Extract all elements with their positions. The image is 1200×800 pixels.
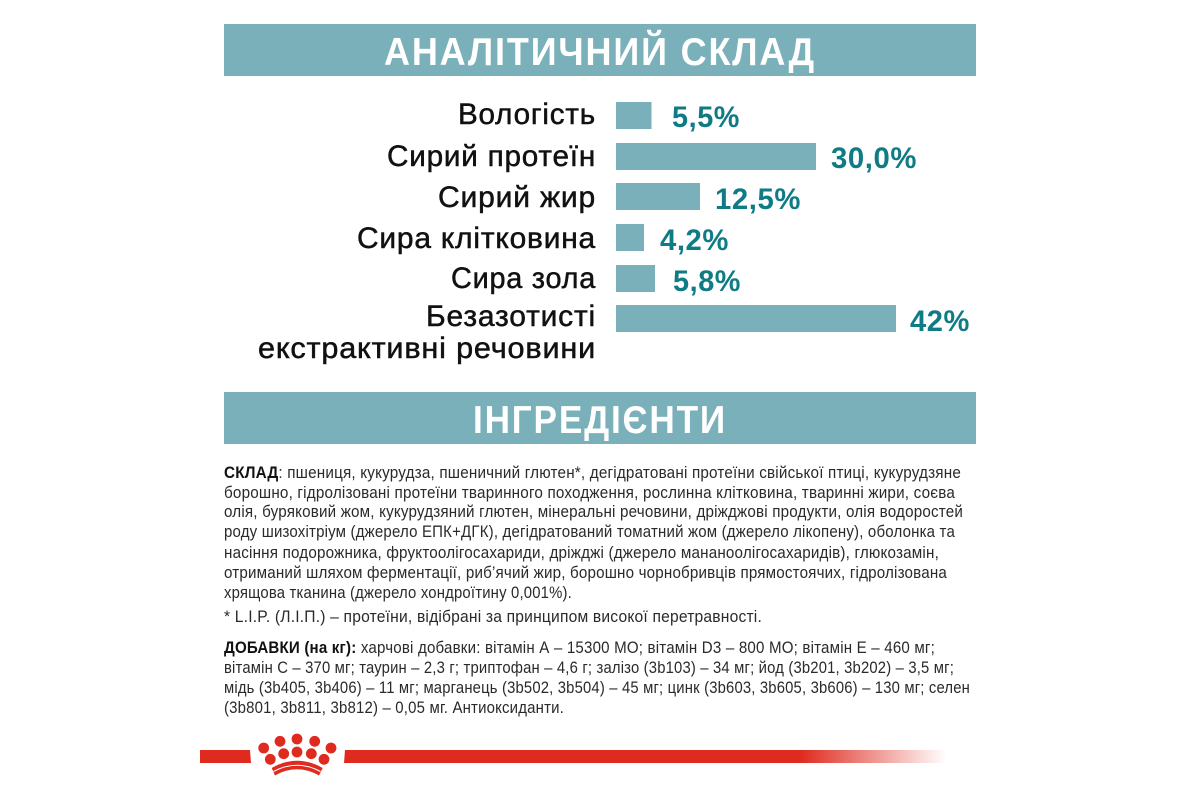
- text block: additives: вітамін С – 370 мг; таурин – 2,3 г; триптофан – 4,6 г; залізо (3b103) – 34 мг; йод (3b201, 3b202) – 3,5 мг;: [224, 659, 954, 677]
- text block: composition: СКЛАД: пшениця, кукурудза, пшеничний глютен*, дегідратовані протеїни свійської птиці, кукурудзяне: [224, 464, 961, 482]
- row: crude fat: [438, 181, 801, 216]
- text block: composition: насіння подорожника, фруктоолігосахариди, дріжджі (джерело мананоолігосахаридів), глюкозамін,: [224, 544, 939, 562]
- text block: composition: роду шизохітріум (джерело ЕПК+ДГК), дегідратований томатний жом (джерело лікопену), оболонка та: [224, 523, 956, 541]
- header: analytical composition: [224, 24, 976, 76]
- row: crude ash: Сира зола: [451, 262, 596, 295]
- row: nitrogen-free extract: екстрактивні речовини: [258, 332, 596, 365]
- header: ingredients: ІНГРЕДІЄНТИ: [473, 399, 727, 442]
- text block: additives: мідь (3b405, 3b406) – 11 мг; марганець (3b502, 3b504) – 45 мг; цинк (3b603, 3b605, 3b606) – 130 мг; селен: [224, 679, 970, 697]
- text block: additives: (3b801, 3b811, 3b812) – 0,05 мг. Антиоксиданти.: [224, 699, 564, 717]
- text block: additives: [224, 639, 970, 717]
- header: analytical composition: АНАЛІТИЧНИЙ СКЛАД: [384, 29, 816, 74]
- row: moisture: Вологість: [458, 98, 596, 131]
- header: ingredients: [224, 392, 976, 444]
- row: crude protein: [387, 140, 917, 175]
- text block: composition: олія, буряковий жом, кукурудзяний глютен, мінеральні речовини, дріжджові продукти, олія водоростей: [224, 503, 963, 521]
- footer: red brand stripe: [200, 750, 946, 763]
- row: crude fibre: [357, 222, 729, 257]
- row: nitrogen-free extract: 42%: [910, 305, 970, 338]
- footnote: L.I.P.: * L.I.P. (Л.І.П.) – протеїни, відібрані за принципом високої перетравності.: [224, 608, 762, 626]
- row: crude protein: Сирий протеїн: [387, 140, 596, 173]
- text block: composition: [224, 464, 963, 602]
- row: moisture: 5,5%: [672, 101, 740, 134]
- row: crude protein: 30,0%: [831, 142, 917, 175]
- bar chart: analytical composition: [258, 98, 970, 365]
- row: crude ash: [451, 262, 741, 298]
- row: nitrogen-free extract: Безазотисті: [426, 300, 596, 333]
- row: crude fat: 12,5%: [715, 183, 801, 216]
- row: nitrogen-free extract: [258, 300, 970, 365]
- text block: composition: борошно, гідролізовані протеїни тваринного походження, рослинна клітковина, тваринні жири, соєва: [224, 484, 956, 502]
- text block: composition: хрящова тканина (джерело хондроїтину 0,001%).: [224, 584, 572, 602]
- row: crude fat: Сирий жир: [438, 181, 596, 214]
- row: crude fibre: 4,2%: [660, 224, 729, 257]
- row: moisture: [458, 98, 740, 134]
- text block: composition: отриманий шляхом ферментації, риб’ячий жир, борошно чорнобривців прямостоячих, гідролізована: [224, 564, 948, 582]
- row: crude fibre: Сира клітковина: [357, 222, 596, 255]
- icon: crown logo: [258, 734, 336, 776]
- row: crude ash: 5,8%: [673, 265, 741, 298]
- text block: additives: ДОБАВКИ (на кг): харчові добавки: вітамін А – 15300 МО; вітамін D3 – 800 МО; вітамін Е – 460 мг;: [224, 639, 935, 657]
